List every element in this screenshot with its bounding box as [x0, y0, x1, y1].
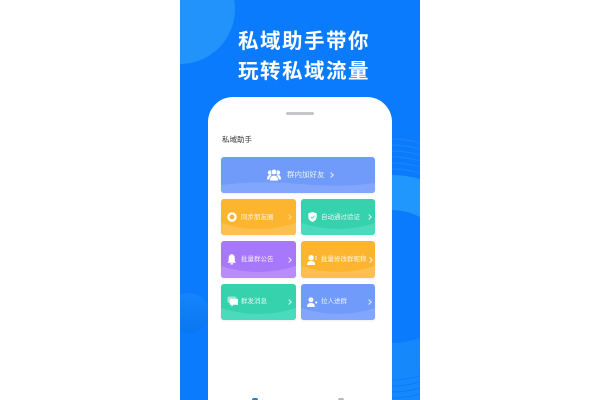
icon: chat bubbles [227, 296, 238, 307]
label: 群内加好友 [287, 170, 324, 179]
title line 2: 玩转私域流量 [238, 60, 370, 83]
card: add friends in group [221, 157, 375, 193]
icon: ring [227, 212, 237, 222]
chevron [328, 172, 334, 178]
chevron [286, 257, 292, 263]
chevron [367, 257, 373, 263]
panel: phone screen [208, 97, 392, 400]
card: invite to group [301, 284, 375, 320]
label: 批量群公告 [241, 256, 274, 263]
icon: shield [308, 212, 317, 222]
label: 批量修改群昵称 [321, 256, 366, 263]
title [238, 30, 370, 83]
icon: person with list [307, 255, 317, 265]
card: sync moments [221, 199, 296, 235]
icon: people [267, 170, 281, 181]
chevron [366, 214, 372, 220]
label: 拉人进群 [321, 298, 347, 305]
decorative circle top left [125, 0, 235, 64]
icon: bell [228, 254, 236, 264]
label: 自动通过验证 [321, 214, 360, 221]
chevron [286, 214, 292, 220]
title line 1: 私域助手带你 [238, 30, 370, 53]
card: auto verification [301, 199, 375, 235]
label: 群发消息 [241, 298, 267, 305]
panel: blue poster background [180, 0, 420, 400]
chevron [366, 299, 372, 305]
chevron [286, 299, 292, 305]
bottom tab icon left [252, 398, 258, 400]
decorative waves and lower left circle [180, 138, 420, 400]
card: bulk announcement [221, 241, 296, 278]
label: 同步朋友圈 [241, 214, 274, 221]
phone handle [286, 112, 314, 114]
card: bulk rename [301, 241, 375, 278]
icon: person add [307, 297, 318, 307]
screen heading: 私域助手 [222, 135, 252, 144]
bottom tab icon right [338, 398, 344, 400]
card: group message [221, 284, 296, 320]
